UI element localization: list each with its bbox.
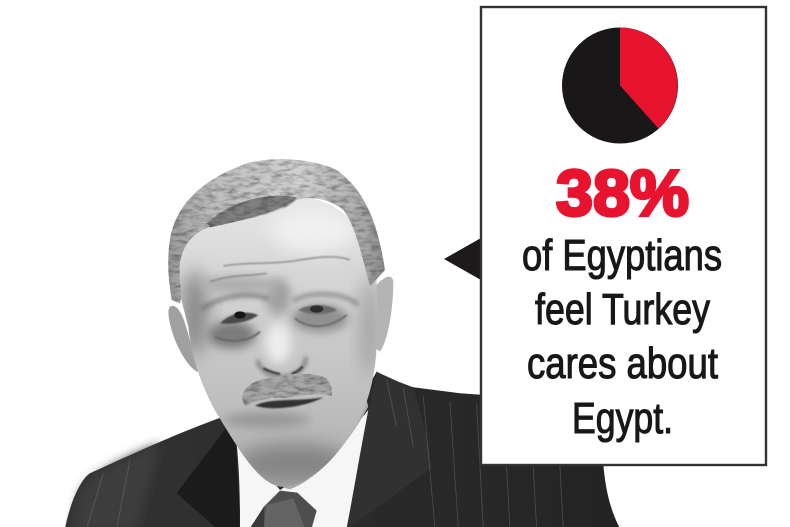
moustache <box>242 374 332 407</box>
right eye <box>295 305 347 326</box>
statement text <box>522 231 722 443</box>
nose <box>257 323 306 377</box>
eyebrows <box>203 294 357 308</box>
statement text: Egypt. <box>572 394 673 443</box>
neck <box>233 373 368 489</box>
hair <box>168 159 385 303</box>
right ear <box>373 277 393 352</box>
forehead wrinkles <box>210 257 350 282</box>
left ear <box>168 306 199 372</box>
suit jacket <box>65 372 620 527</box>
left eye <box>215 311 260 341</box>
callout box <box>481 7 766 465</box>
shirt and collar <box>236 410 368 527</box>
face <box>168 159 385 487</box>
big number: 38% <box>556 156 689 230</box>
mouth <box>255 397 323 408</box>
statement text: of Egyptians <box>522 231 722 280</box>
statement text: feel Turkey <box>535 285 710 334</box>
callout pointer <box>444 238 481 280</box>
statement text: cares about <box>527 339 718 388</box>
pie chart: 38 percent <box>562 28 678 144</box>
necktie <box>250 491 317 527</box>
portrait: man in pinstriped suit <box>65 159 620 527</box>
